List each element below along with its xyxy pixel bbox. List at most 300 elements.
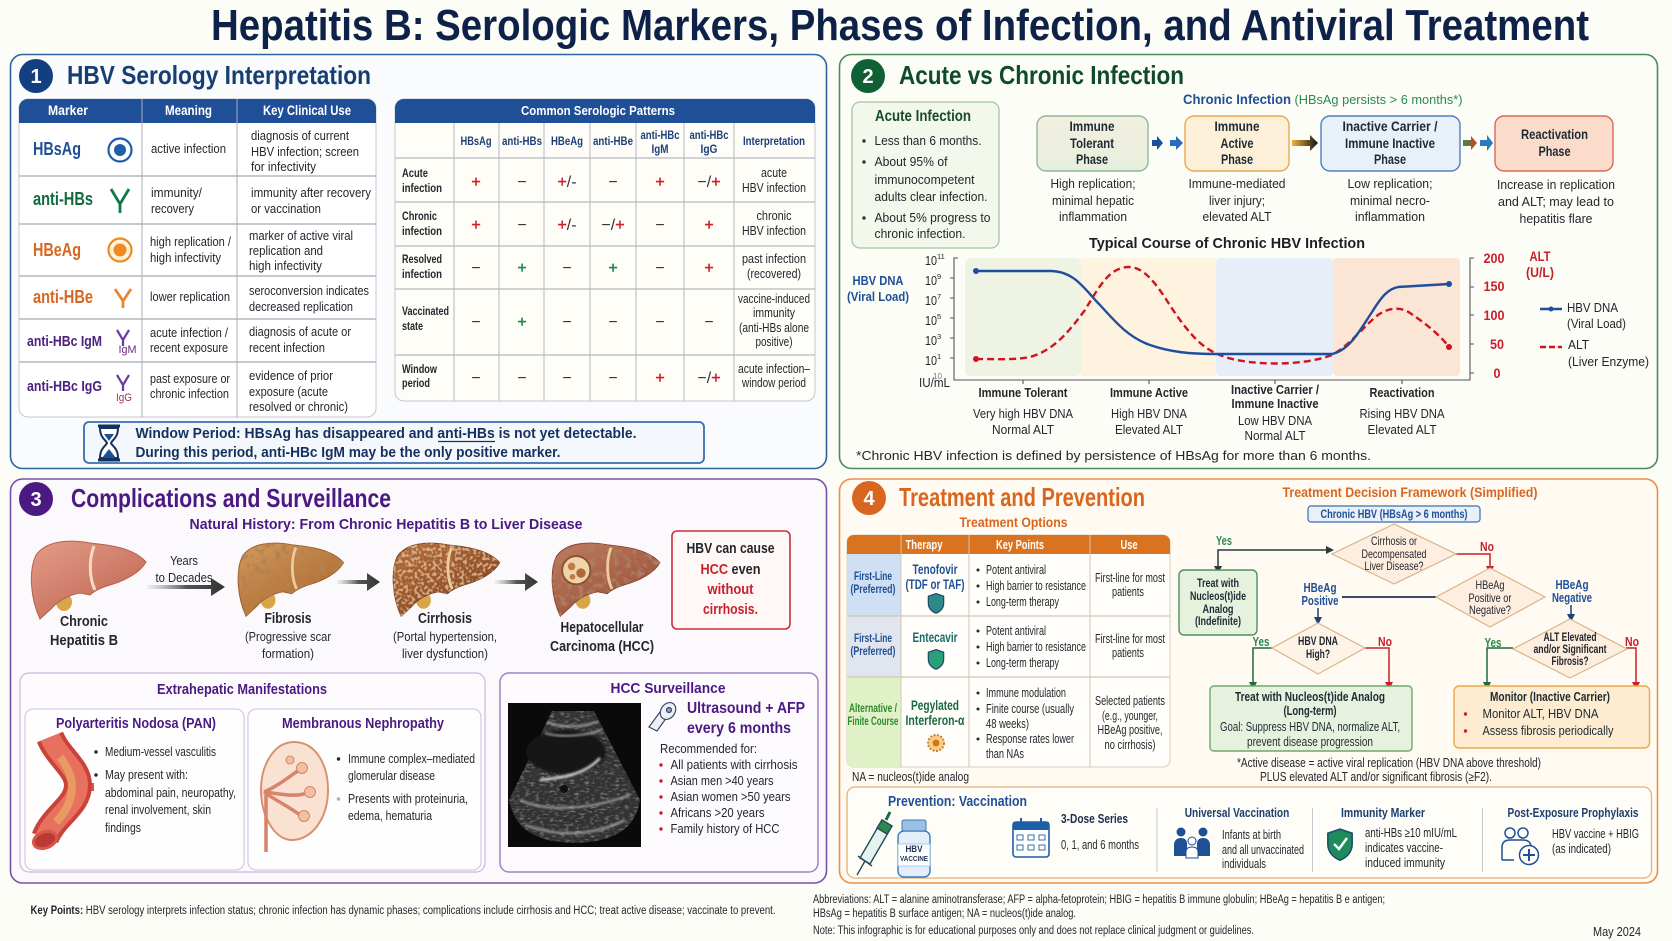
table: treatment options: Immune modulation xyxy=(986,686,1066,700)
badge 4: 4 xyxy=(863,488,875,510)
note: active disease: *Active disease = active viral replication (HBV DNA above threshold) xyxy=(1237,756,1541,770)
heading: Complications and Surveillance: Complications and Surveillance xyxy=(71,483,391,513)
legend: (Liver Enzyme) xyxy=(1568,354,1649,369)
left axis labels: 10 xyxy=(933,372,942,381)
badge 4 xyxy=(852,481,886,515)
flow: chronic phases xyxy=(1037,116,1613,171)
meaning column: high replication / xyxy=(150,234,231,249)
line of therapy column: Finite Course xyxy=(848,716,898,728)
branch labels: Yes xyxy=(1252,635,1270,649)
meaning column xyxy=(150,141,231,401)
surveillance list: Africans >20 years xyxy=(670,805,765,820)
surveillance list: Family history of HCC xyxy=(670,821,780,836)
table: markers: Meaning xyxy=(165,103,212,118)
outcome: treat long-term: Treat with Nucleos(t)ide Analog xyxy=(1235,689,1385,704)
key clinical use column: or vaccination xyxy=(251,201,321,216)
arrow: years to decades: Years xyxy=(170,553,198,568)
card: polyarteritis nodosa: Polyarteritis Nodosa (PAN) xyxy=(56,716,216,732)
stage labels: Cirrhosis xyxy=(418,611,472,627)
line: ALT xyxy=(976,267,1449,364)
arrow: years to decades: to Decades xyxy=(156,570,213,585)
card: membranous nephropathy: Membranous Nephropathy xyxy=(282,716,444,732)
meaning column: lower replication xyxy=(150,289,230,304)
item: universal vaccination: individuals xyxy=(1222,857,1266,871)
meaning column: chronic infection xyxy=(150,386,229,401)
meaning column: immunity/ xyxy=(151,185,202,200)
box: Acute Infection: immunocompetent xyxy=(874,172,975,187)
icon: interferon xyxy=(928,735,944,751)
icon: ultrasound probe xyxy=(649,700,679,731)
table: treatment options xyxy=(847,535,1170,767)
item: universal vaccination xyxy=(1185,806,1304,871)
table: common serologic patterns: anti-HBc xyxy=(640,130,680,142)
decision: HBV DNA high: HBV DNA xyxy=(1298,636,1338,648)
heading: HBV Serology Interpretation: HBV Serology Interpretation xyxy=(67,60,371,90)
stage labels: Hepatitis B xyxy=(50,633,118,649)
item: 3-dose series: 3-Dose Series xyxy=(1061,811,1128,826)
panel 3: Complications and Surveillance xyxy=(10,479,826,883)
phase descriptions: and ALT; may lead to xyxy=(1498,194,1614,209)
plus and minus results: − xyxy=(704,314,714,331)
arrows between phases xyxy=(1152,135,1493,151)
row labels: Vaccinated xyxy=(402,304,449,318)
panel 4: Treatment and Prevention xyxy=(840,479,1658,883)
phase descriptions: minimal hepatic xyxy=(1052,193,1134,208)
icon: calendar xyxy=(1013,818,1049,857)
key clinical use column: exposure (acute xyxy=(249,384,328,399)
icon: HBV vaccine vial: VACCINE xyxy=(900,854,928,863)
item: post-exposure prophylaxis: (as indicated) xyxy=(1552,842,1611,856)
left axis labels: 9 xyxy=(937,272,941,281)
footer: abbreviations and note: HBsAg = hepatitis B surface antigen; NA = nucleos(t)ide analog. xyxy=(813,908,1076,920)
interpretation column: HBV infection xyxy=(742,224,806,238)
icon: IgM antibody: IgM xyxy=(118,344,136,356)
plus and minus results: +/- xyxy=(557,174,577,191)
table: treatment options: Key Points xyxy=(996,538,1044,552)
line: HBV DNA xyxy=(976,271,1449,354)
table: common serologic patterns: HBsAg xyxy=(460,136,492,148)
outcome: treat indefinite: Treat with xyxy=(1197,578,1239,590)
icon: anti-HBe antibody xyxy=(115,289,131,308)
branch labels: No xyxy=(1625,635,1639,649)
decision: cirrhosis xyxy=(1332,524,1456,584)
row labels: infection xyxy=(402,224,442,238)
icon: HBeAg antigen xyxy=(108,238,132,262)
outcome: treat long-term xyxy=(1210,686,1412,751)
connector lines xyxy=(1218,550,1636,683)
right axis labels: 200 xyxy=(1484,251,1504,266)
table: treatment options: Response rates lower xyxy=(986,732,1074,746)
phase: Immune Active: Active xyxy=(1220,136,1254,151)
flowchart: treatment decision framework xyxy=(1179,485,1650,784)
card: polyarteritis nodosa: abdominal pain, neuropathy, xyxy=(105,785,236,800)
table: common serologic patterns: IgM xyxy=(652,144,668,156)
arrow: fibrosis to cirrhosis xyxy=(337,573,380,591)
liver: fibrosis xyxy=(238,543,344,616)
note: NA definition: NA = nucleos(t)ide analog xyxy=(852,770,969,784)
phase captions under chart: Inactive Carrier / xyxy=(1231,382,1319,397)
decision: HBeAg xyxy=(1436,568,1545,627)
badge 3: 3 xyxy=(30,489,42,511)
surveillance list: Recommended for: xyxy=(660,741,757,756)
plus and minus results: − xyxy=(517,370,527,387)
icon: shield entecavir xyxy=(928,650,944,669)
phase: Immune Tolerant: Phase xyxy=(1076,152,1108,167)
callout: HBV can cause HCC xyxy=(672,531,790,629)
marker names: anti-HBc IgM xyxy=(27,333,102,350)
box: Acute Infection: About 95% of xyxy=(874,154,948,169)
surveillance list: Asian men >40 years xyxy=(670,773,774,788)
badge 2: 2 xyxy=(862,66,874,88)
heading: Chronic Infection: (HBsAg persists > 6 months*) xyxy=(1294,92,1462,107)
heading: Chronic Infection xyxy=(1183,92,1462,107)
plus and minus results: − xyxy=(608,174,618,191)
interpretation column: immunity xyxy=(753,306,796,320)
icon: IgG antibody: IgG xyxy=(116,392,132,404)
item: universal vaccination: Universal Vaccination xyxy=(1185,806,1289,820)
plus and minus results: + xyxy=(655,370,665,387)
table: common serologic patterns: Common Serologic Patterns xyxy=(521,103,675,118)
icon: HBsAg antigen xyxy=(108,138,132,162)
decision: HBV DNA high: High? xyxy=(1306,649,1330,661)
phase captions under chart: Immune Inactive xyxy=(1232,396,1318,411)
chart: typical course of chronic HBV xyxy=(847,249,1649,443)
left axis title: HBV DNA xyxy=(852,273,904,288)
phase descriptions: liver injury; xyxy=(1209,193,1265,208)
note: active disease: PLUS elevated ALT and/or significant fibrosis (≥F2). xyxy=(1260,770,1492,784)
outcome: monitor xyxy=(1454,686,1650,748)
phase captions under chart: Rising HBV DNA xyxy=(1360,406,1445,421)
interpretation column: HBV infection xyxy=(742,181,806,195)
branch labels: Positive xyxy=(1302,594,1339,608)
phase descriptions xyxy=(1050,176,1615,226)
plus and minus results: + xyxy=(608,260,618,277)
surveillance headline: every 6 months xyxy=(687,720,791,737)
therapy names: Pegylated xyxy=(911,698,959,713)
decision: cirrhosis: Cirrhosis or xyxy=(1371,534,1417,548)
left axis labels: 10 xyxy=(925,313,937,328)
outcome: treat indefinite: Analog xyxy=(1202,604,1234,616)
left axis labels: 3 xyxy=(937,332,941,341)
icon: IgM antibody xyxy=(117,330,136,356)
image: ultrasound xyxy=(508,703,641,847)
surveillance headline: Ultrasound + AFP xyxy=(687,700,805,717)
interpretation column: acute xyxy=(761,166,787,180)
branch labels: HBeAg xyxy=(1304,581,1336,595)
decision: HBeAg: Negative? xyxy=(1469,603,1511,617)
key clinical use column: immunity after recovery xyxy=(251,185,371,200)
panel: HCC surveillance: HCC Surveillance xyxy=(610,680,726,697)
line of therapy column: Alternative / xyxy=(849,703,898,715)
right axis labels xyxy=(1484,249,1554,381)
decision: HBeAg: Positive or xyxy=(1468,591,1512,605)
decision: ALT elevated: Fibrosis? xyxy=(1552,656,1588,668)
interpretation column: past infection xyxy=(742,252,806,266)
left axis labels: 10 xyxy=(925,353,937,368)
plus and minus results: − xyxy=(471,370,481,387)
surveillance headline xyxy=(687,700,805,737)
outcome: treat indefinite xyxy=(1179,570,1257,635)
phase: Immune Active: Phase xyxy=(1221,152,1253,167)
therapy names: Interferon-α xyxy=(906,713,965,728)
surveillance list: All patients with cirrhosis xyxy=(670,757,798,772)
item: universal vaccination: Infants at birth xyxy=(1222,828,1281,842)
outcome: treat long-term: Goal: Suppress HBV DNA, normalize ALT, xyxy=(1220,719,1400,734)
card: polyarteritis nodosa: May present with: xyxy=(105,767,188,782)
start box: Chronic HBV: Chronic HBV (HBsAg > 6 months) xyxy=(1320,509,1468,521)
plus and minus results: − xyxy=(517,217,527,234)
use column: no cirrhosis) xyxy=(1104,738,1156,752)
phase: Immune Tolerant: Tolerant xyxy=(1070,136,1114,151)
item: universal vaccination: and all unvaccinated xyxy=(1222,843,1304,857)
key clinical use column: resolved or chronic) xyxy=(249,399,348,414)
callout: window period xyxy=(84,422,704,463)
interpretation column: chronic xyxy=(756,209,792,223)
panel: HCC surveillance xyxy=(500,673,818,872)
card: polyarteritis nodosa: Medium-vessel vasculitis xyxy=(105,744,216,759)
phase descriptions: High replication; xyxy=(1050,176,1136,191)
card: polyarteritis nodosa xyxy=(25,709,244,870)
panel 1: HBV Serology Interpretation xyxy=(10,54,826,468)
plus and minus results: − xyxy=(655,217,665,234)
table: common serologic patterns: anti-HBc xyxy=(690,130,729,142)
decision: cirrhosis: Liver Disease? xyxy=(1364,559,1424,573)
plus and minus results: −/+ xyxy=(601,217,625,234)
meaning column: acute infection / xyxy=(150,325,228,340)
flowchart: treatment decision framework: Treatment Decision Framework (Simplified) xyxy=(1282,485,1538,500)
icon: HBV vaccine vial xyxy=(898,820,930,877)
table: common serologic patterns: anti-HBe xyxy=(593,136,633,148)
interpretation column: acute infection– xyxy=(738,362,810,376)
icon: syringe xyxy=(857,812,892,875)
right axis labels: ALT xyxy=(1530,249,1551,264)
table: common serologic patterns xyxy=(395,99,815,401)
card: polyarteritis nodosa: renal involvement, skin xyxy=(105,802,211,817)
phase descriptions: hepatitis flare xyxy=(1520,211,1592,226)
phase captions under chart: Reactivation xyxy=(1370,385,1435,400)
outcome: monitor: Monitor (Inactive Carrier) xyxy=(1490,689,1610,704)
footer: abbreviations and note: Note: This infographic is for educational purposes only and does not replace clinical judgment or guidelines. xyxy=(813,925,1254,937)
row labels: Chronic xyxy=(402,209,437,223)
line of therapy column: (Preferred) xyxy=(850,646,896,658)
left axis labels: 11 xyxy=(937,252,945,261)
phase descriptions: elevated ALT xyxy=(1202,209,1272,224)
liver: chronic hepatitis B xyxy=(31,541,146,619)
table: treatment options: than NAs xyxy=(986,747,1024,761)
left axis labels: IU/mL xyxy=(919,375,950,390)
stage labels: Fibrosis xyxy=(264,611,312,627)
branch labels: HBeAg xyxy=(1556,578,1588,592)
panel: prevention vaccination: Prevention: Vaccination xyxy=(888,794,1027,810)
stage labels: (Progressive scar xyxy=(245,629,332,644)
phase descriptions: inflammation xyxy=(1059,209,1127,224)
meaning column: recovery xyxy=(151,201,194,216)
key clinical use column: evidence of prior xyxy=(249,368,334,383)
row labels: state xyxy=(402,319,423,333)
plus and minus results: + xyxy=(517,260,527,277)
phase captions under chart: Normal ALT xyxy=(1244,428,1306,443)
marker names xyxy=(27,139,102,395)
arrow: cirrhosis to HCC xyxy=(495,573,538,591)
branch labels: Yes xyxy=(1484,636,1502,650)
box: Acute Infection xyxy=(852,102,999,248)
marker names: HBsAg xyxy=(33,139,81,159)
card: membranous nephropathy: Presents with proteinuria, xyxy=(348,791,468,806)
phase captions under chart: Normal ALT xyxy=(992,422,1054,437)
plus and minus results: + xyxy=(517,314,527,331)
key clinical use column: replication and xyxy=(249,243,323,258)
therapy names: Entecavir xyxy=(912,630,958,645)
icon: anti-HBs antibody xyxy=(111,189,129,213)
start box: Chronic HBV xyxy=(1308,506,1480,522)
table: treatment options: Finite course (usually xyxy=(986,702,1075,716)
plus and minus results: − xyxy=(517,174,527,191)
phase descriptions: Low replication; xyxy=(1348,176,1432,191)
decision: ALT elevated: and/or Significant xyxy=(1534,644,1607,656)
plus and minus results: − xyxy=(471,314,481,331)
phase: Inactive Carrier: Phase xyxy=(1374,152,1406,167)
phase captions under chart: Elevated ALT xyxy=(1115,422,1183,437)
box: Acute Infection: chronic infection. xyxy=(874,226,966,241)
therapy names: (TDF or TAF) xyxy=(906,577,964,592)
right axis labels: 150 xyxy=(1484,279,1504,294)
phase descriptions: inflammation xyxy=(1355,209,1425,224)
marker names: anti-HBs xyxy=(33,189,93,209)
key clinical use column: HBV infection; screen xyxy=(251,144,359,159)
phase descriptions: Increase in replication xyxy=(1497,177,1615,192)
footer: date: May 2024 xyxy=(1593,925,1641,939)
use column: HBeAg positive, xyxy=(1098,723,1162,737)
use column: Selected patients xyxy=(1095,694,1165,708)
table: treatment options: Therapy xyxy=(906,538,943,552)
callout: HBV can cause HCC: cirrhosis. xyxy=(703,602,758,618)
table: treatment options: Use xyxy=(1120,538,1138,552)
surveillance list xyxy=(659,741,798,836)
key clinical use column: for infectivity xyxy=(251,159,316,174)
table: treatment options: High barrier to resistance xyxy=(986,579,1086,593)
card: membranous nephropathy: Immune complex–mediated xyxy=(348,751,475,766)
chart title: Typical Course of Chronic HBV Infection xyxy=(1089,235,1365,252)
item: post-exposure prophylaxis xyxy=(1508,806,1639,856)
callout: HBV can cause HCC: HCC even xyxy=(700,562,760,578)
left axis labels: 5 xyxy=(937,312,941,321)
surveillance list: Asian women >50 years xyxy=(670,789,791,804)
interpretation column: vaccine-induced xyxy=(738,292,810,306)
phase: Reactivation: Reactivation xyxy=(1521,127,1588,142)
plus and minus results: − xyxy=(608,370,618,387)
item: immunity marker: induced immunity xyxy=(1365,856,1446,870)
legend: (Viral Load) xyxy=(1567,316,1626,331)
phase captions under chart xyxy=(973,382,1445,443)
box: Acute Infection: Less than 6 months. xyxy=(874,133,982,148)
table: common serologic patterns: anti-HBs xyxy=(502,136,542,148)
outcome: treat long-term: (Long-term) xyxy=(1284,703,1336,718)
use column: (e.g., younger, xyxy=(1102,709,1158,723)
outcome: treat indefinite: (Indefinite) xyxy=(1195,616,1241,628)
plus and minus results: − xyxy=(562,260,572,277)
phase: Inactive Carrier: Inactive Carrier / xyxy=(1342,119,1438,134)
key clinical use column: high infectivity xyxy=(249,258,322,273)
decision: HBeAg: HBeAg xyxy=(1476,578,1504,592)
plus and minus results xyxy=(471,174,721,387)
left axis labels: 10 xyxy=(925,253,937,268)
subheading: treatment options: Treatment Options xyxy=(960,514,1068,530)
decision: HBV DNA high xyxy=(1272,623,1365,674)
right axis labels: 0 xyxy=(1494,366,1500,381)
badge 2 xyxy=(851,59,885,93)
plus and minus results: −/+ xyxy=(697,370,721,387)
therapy names: Tenofovir xyxy=(912,562,958,577)
plus and minus results: − xyxy=(562,370,572,387)
item: immunity marker: Immunity Marker xyxy=(1341,806,1425,820)
phase captions under chart: Immune Tolerant xyxy=(978,385,1068,400)
icon: family xyxy=(1174,828,1210,858)
right axis labels: (U/L) xyxy=(1526,265,1554,280)
liver: cirrhosis xyxy=(393,543,500,616)
panel: prevention vaccination xyxy=(847,787,1652,878)
left axis labels: 7 xyxy=(937,292,941,301)
use column xyxy=(1095,571,1165,752)
badge 1: 1 xyxy=(30,66,42,88)
marker names: HBeAg xyxy=(33,240,81,260)
interpretation column xyxy=(738,166,810,390)
footer: abbreviations and note: Abbreviations: ALT = alanine aminotransferase; AFP = alpha-fetoprotein; HBIG = hepatitis B immune globulin; HBeAg = hepatitis B e antigen; xyxy=(813,894,1385,906)
flow: natural history xyxy=(31,541,660,661)
line of therapy column: (Preferred) xyxy=(850,584,896,596)
left axis labels: 10 xyxy=(925,333,937,348)
line of therapy column: First-Line xyxy=(854,633,892,645)
callout: HBV can cause HCC: HBV can cause xyxy=(686,541,774,557)
meaning column: past exposure or xyxy=(150,371,231,386)
stage labels: (Portal hypertension, xyxy=(393,629,497,644)
panel 2: Acute vs Chronic Infection xyxy=(840,54,1658,468)
interpretation column: (anti-HBs alone xyxy=(739,321,809,335)
decision: cirrhosis: Decompensated xyxy=(1362,547,1426,561)
left axis title: (Viral Load) xyxy=(847,289,909,304)
branch labels: No xyxy=(1378,635,1392,649)
branch labels: Negative xyxy=(1552,591,1592,605)
meaning column: active infection xyxy=(151,141,226,156)
footnote: chronic definition: *Chronic HBV infection is defined by persistence of HBsAg for more than 6 months. xyxy=(856,448,1371,463)
item: post-exposure prophylaxis: Post-Exposure Prophylaxis xyxy=(1508,806,1639,820)
row labels: Acute xyxy=(402,166,428,180)
table: treatment options: Potent antiviral xyxy=(986,563,1046,577)
row labels: Window xyxy=(402,362,437,376)
badge 1 xyxy=(19,59,53,93)
plus and minus results: − xyxy=(562,314,572,331)
table: treatment options: 48 weeks) xyxy=(986,717,1029,731)
stage labels: liver dysfunction) xyxy=(402,646,488,661)
box: Acute Infection: adults clear infection. xyxy=(874,189,988,204)
meaning column: high infectivity xyxy=(150,250,221,265)
phase: Immune Tolerant xyxy=(1037,116,1148,171)
meaning column: recent exposure xyxy=(150,340,228,355)
icon: inflamed artery xyxy=(31,737,94,852)
callout: window period: Window Period: HBsAg has disappeared and anti-HBs is not yet detectable. xyxy=(136,426,636,442)
use column: First-line for most xyxy=(1095,571,1165,585)
phase captions under chart: High HBV DNA xyxy=(1111,406,1187,421)
plus and minus results: − xyxy=(655,260,665,277)
left axis labels: 1 xyxy=(937,352,941,361)
item: immunity marker xyxy=(1341,806,1457,870)
branch labels: No xyxy=(1480,540,1494,554)
icon: clinician plus xyxy=(1502,828,1538,864)
phase: Inactive Carrier xyxy=(1321,116,1460,171)
phase: Immune Active xyxy=(1185,116,1289,171)
stage labels: Chronic xyxy=(60,614,108,630)
outcome: treat long-term: prevent disease progression xyxy=(1247,734,1373,749)
row labels: infection xyxy=(402,181,442,195)
